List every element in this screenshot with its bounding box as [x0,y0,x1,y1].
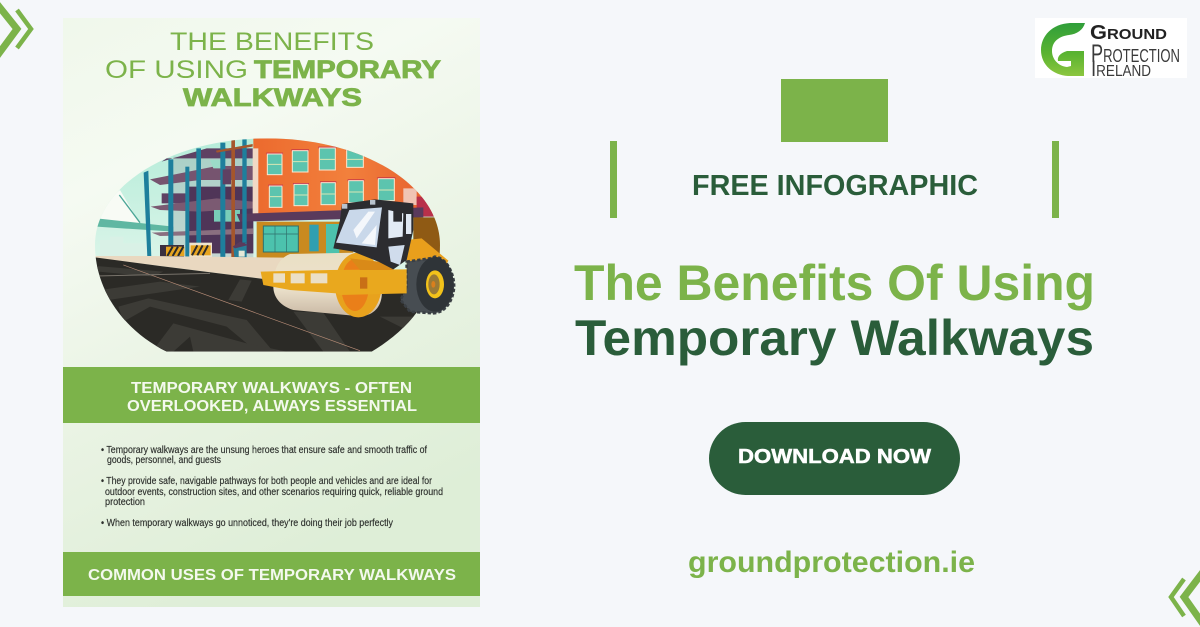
roller body [407,238,448,270]
heading: main title: The Benefits Of Using [574,255,1095,311]
purple structure [173,157,253,258]
icon: bottom-right chevrons [1171,572,1200,624]
band: common uses heading [63,552,480,596]
left accent bar [610,141,617,218]
band: section heading often overlooked: OVERLOOKED, ALWAYS ESSENTIAL [127,398,417,415]
panel: poster preview [63,18,480,607]
utility pole [231,140,235,262]
logo: Ground Protection Ireland [1035,18,1187,81]
poster title: OF USING [105,56,248,84]
band: section heading often overlooked: TEMPORARY WALKWAYS - OFTEN [131,380,412,397]
drum [273,253,382,316]
text block: bullet list: • When temporary walkways go unnoticed, they're doing their job perfectly [101,518,393,529]
label: free infographic: FREE INFOGRAPHIC [692,170,978,202]
website url: groundprotection.ie [688,546,975,579]
icon: G leaf mark [1041,23,1085,76]
decorative green square [781,79,888,142]
right accent bar [1052,141,1059,218]
window lintels [266,147,395,187]
road [96,258,417,352]
heading: main title: Temporary Walkways [575,310,1094,366]
icon: top-left chevrons [0,4,31,56]
illustration: road roller at construction site [90,135,454,357]
windows [267,148,394,207]
text block: bullet list: goods, personnel, and guests [107,455,221,466]
logo: Ground Protection Ireland: IRELAND [1091,56,1151,81]
band: common uses heading: COMMON USES OF TEMPORARY WALKWAYS [88,567,456,584]
cabin [333,199,413,269]
poster title: THE BENEFITS [170,28,374,56]
pavement [96,256,284,279]
barriers [160,243,212,258]
blue columns [144,139,247,259]
rear wheel [401,257,454,313]
button: download now [709,422,960,495]
text block: bullet list [101,445,443,529]
heading: main title [574,255,1095,366]
orange building [253,137,443,215]
text block: bullet list: • Temporary walkways are the unsung heroes that ensure safe and smooth traffic of [101,445,427,456]
yoke frame [261,269,407,295]
text block: bullet list: protection [105,497,145,508]
band: section heading often overlooked [63,367,480,423]
poster title: TEMPORARY [254,56,441,84]
poster title [105,28,441,112]
poster title: WALKWAYS [183,84,362,112]
text block: bullet list: outdoor events, construction sites, and other scenarios requiring quick, reliable ground [105,487,443,498]
text block: bullet list: • They provide safe, navigable pathways for both people and vehicles and are ideal for [101,476,433,487]
mailbox [233,242,247,258]
shopfront [237,207,423,222]
button: download now: DOWNLOAD NOW [738,446,931,468]
logo: Ground Protection Ireland: GROUND [1090,22,1167,44]
